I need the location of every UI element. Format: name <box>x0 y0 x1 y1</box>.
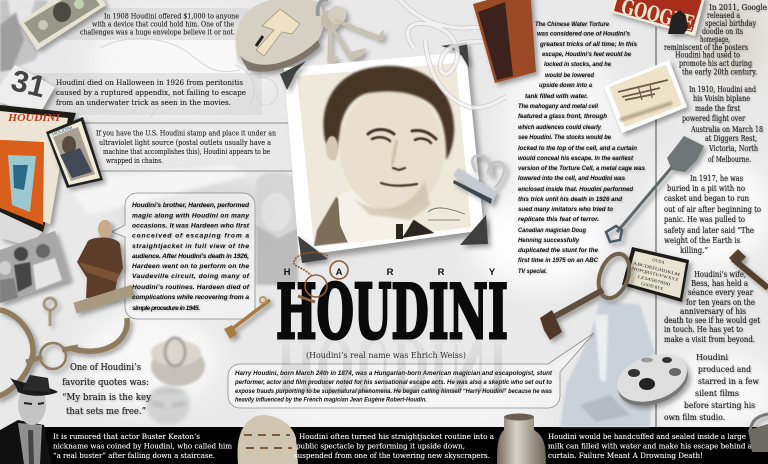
text: buried alive 1917: casket and began to run <box>664 194 749 203</box>
faded padlock <box>151 338 205 386</box>
text: Bess seance: make a visit from beyond. <box>664 335 755 344</box>
text: Chinese Water Torture: see Houdini. The stocks would be <box>518 134 611 141</box>
text: Hardeen: straightjacket in full view of the <box>132 243 249 250</box>
text: Bess seance <box>664 270 761 344</box>
text: Chinese Water Torture: version of the Torture Cell, a metal cage was <box>518 165 645 172</box>
divider lines: stamp note <box>60 123 300 171</box>
text: Halloween death: caused by a ruptured appendix, not failing to escape <box>56 88 246 97</box>
rope <box>396 0 506 108</box>
icon: Ouija board: NOPQRSTUVWXYZ <box>631 266 679 282</box>
portrait photo of Houdini <box>284 52 488 261</box>
text: Halloween death <box>56 78 246 107</box>
text band: Halloween <box>0 73 262 115</box>
text: favorite quote: One of Houdini’s <box>70 363 141 373</box>
text: 1908 challenge: challenges was a huge envelope believe it or not. <box>80 28 235 36</box>
title: Harry: A <box>336 267 343 278</box>
icon: handcuffs <box>0 290 133 397</box>
text: Hardeen: Houdini’s routines. Hardeen died of <box>132 284 250 291</box>
text: Buster nickname: nickname was coined by Houdini, who called him <box>53 442 232 450</box>
text: Google doodle: released a <box>707 11 740 20</box>
text: Chinese Water Torture: featured a glass front, through <box>518 113 607 120</box>
center callout box <box>228 333 594 408</box>
text: Hardeen: conceived of escaping from a <box>132 232 249 240</box>
text: Chinese Water Torture: greatest tricks of all time; In this <box>539 41 637 48</box>
poster book <box>0 105 76 246</box>
text: buried alive 1917 <box>664 174 761 255</box>
text: milk can escape: Houdini would be handcuffed and sealed inside a large <box>548 432 746 441</box>
text: Chinese Water Torture: duplicated the stunt for the <box>518 247 598 254</box>
text: film studio: Houdini <box>696 353 728 362</box>
text: Voisin biplane: his Voisin biplane <box>693 94 750 103</box>
text: Chinese Water Torture: lowered into the cell, and Houdini was <box>518 175 625 182</box>
title: Harry: R <box>438 267 445 278</box>
text: Voisin biplane: powered flight over <box>682 114 745 123</box>
text: Chinese Water Torture: would conceal his escape. In the earliest <box>518 155 634 162</box>
text: buried alive 1917: panic. He was pulled to <box>664 215 745 224</box>
text: Houdini biography <box>234 370 553 404</box>
icon: calendar 31: 31 <box>8 64 49 104</box>
text: Chinese Water Torture: Henning successfully <box>518 237 579 244</box>
text: 1908 challenge: with a device that could hold him. One of the <box>92 20 234 28</box>
text: Voisin biplane: of Melbourne. <box>708 155 751 164</box>
text: film studio: produced and <box>698 365 751 374</box>
text: film studio <box>664 353 759 422</box>
title: Harry: H <box>284 267 291 278</box>
text: U.S. stamp: machine that accomplishes this), Houdini appears to be <box>103 147 270 156</box>
text: Chinese Water Torture: locked to the top of the cell, and a curtain <box>518 145 637 152</box>
figure: Hardeen <box>77 220 123 298</box>
text: film studio: own film studio. <box>664 413 725 422</box>
text: milk can escape: milk can filled with water and make his escape behind a <box>548 442 752 450</box>
icon: Ouija board: GOOD BYE <box>641 281 664 291</box>
text: Bess seance: anniversary of his <box>680 307 746 316</box>
text: Houdini biography: heavily influenced by the French magician Jean Eugène Robert-Houdin. <box>235 396 427 404</box>
icon: milk can <box>497 414 546 464</box>
text: Chinese Water Torture: which audiences could clearly <box>518 124 601 131</box>
icon: binder clip <box>453 156 504 204</box>
text: Chinese Water Torture: The mahogany and metal cell <box>518 103 598 110</box>
text: Buster nickname: “a real buster” after falling down a staircase. <box>53 451 215 460</box>
text: Google doodle: homepage, <box>700 35 730 44</box>
text: Chinese Water Torture: upside down into a <box>539 82 592 89</box>
text: film studio: before starting his <box>684 401 755 410</box>
text: Bess seance: for ten years on the <box>686 298 755 307</box>
icon: straitjacket <box>238 415 298 464</box>
text: Chinese Water Torture: sued many imitators who tried to <box>518 206 613 213</box>
faded portrait top left <box>0 0 48 72</box>
poster book: HOUDINI <box>7 112 61 124</box>
text: Chinese Water Torture: would be lowered <box>545 72 595 79</box>
text: Chinese Water Torture: this trick until his death in 1926 and <box>518 196 623 203</box>
icon: big skeleton key <box>540 250 635 340</box>
text: Chinese Water Torture: Canadian magician Doug <box>518 227 586 234</box>
icon: calendar 31 <box>0 64 55 117</box>
subtitle: real name: (Houdini’s real name was Ehrich Weiss) <box>306 351 466 360</box>
text: Google doodle: Houdini had used to <box>675 50 740 60</box>
icon: photo corners <box>280 42 488 263</box>
text: U.S. stamp: If you have the U.S. Houdini stamp and place it under an <box>96 128 276 138</box>
text: 1908 challenge: In 1908 Houdini offered $1,000 to anyone <box>104 12 239 20</box>
text: favorite quote: that sets me free.” <box>66 407 146 417</box>
text: U.S. stamp: wrapped in chains. <box>106 156 163 165</box>
text: Chinese Water Torture: replicate this feat of terror. <box>518 216 599 223</box>
text: Google doodle <box>664 3 767 76</box>
icon: Ouija board: ABCDEFGHIJKLM <box>633 260 681 277</box>
text: Houdini biography: Harry Houdini, born March 24th in 1874, was a Hungarian-born American magician and escapologist, stunt <box>235 370 553 377</box>
text: buried alive 1917: In 1917, he was <box>690 174 743 183</box>
text: Halloween death: from an underwater trick as seen in the movies. <box>56 98 231 107</box>
text: milk can escape <box>548 432 752 460</box>
icon: Ouija board <box>622 247 689 302</box>
text: Chinese Water Torture: escape, Houdini’s feet would be <box>542 51 631 58</box>
text: 1908 challenge <box>80 12 239 36</box>
text: Bess seance: in touch. He has yet to <box>664 325 743 334</box>
text: Houdini biography: performer, actor and film producer noted for his sensational escape acts. He was also a skeptic who set out to <box>234 379 552 386</box>
text: Google doodle: doodle on its <box>702 27 743 36</box>
text: favorite quote: “My brain is the key <box>62 392 152 403</box>
text band: 1908 challenge <box>60 8 255 40</box>
icon: lock bottom right <box>748 414 768 452</box>
title: Houdini: HOUDINI <box>276 268 508 356</box>
title: Harry: Y <box>489 267 496 278</box>
text: straightjacket routine <box>294 432 494 460</box>
text: Voisin biplane <box>682 85 763 164</box>
icon: Ouija board: 1234567890 <box>637 274 672 287</box>
text: Hardeen <box>132 202 250 312</box>
text: Chinese Water Torture: TV special. <box>518 268 547 275</box>
text: Bess seance: séance every year <box>688 288 753 297</box>
icon: postage stamp <box>46 117 103 188</box>
icon: Ouija board: OUIJA <box>652 257 666 265</box>
column divider <box>655 27 657 427</box>
family photo <box>0 231 70 303</box>
text: milk can escape: curtain. Failure Meant A Drowning Death! <box>548 451 703 460</box>
text: Halloween death: Houdini died on Halloween in 1926 from peritonitis <box>56 78 243 87</box>
title: Harry <box>284 267 496 278</box>
text: Hardeen: occasions. It was Hardeen who first <box>132 222 250 230</box>
Hardeen callout box <box>112 193 255 319</box>
icon: small chain rings <box>294 252 348 302</box>
text: Chinese Water Torture: first time in 1975 on an ABC <box>518 257 598 264</box>
text: Hardeen: complications while recovering from a <box>132 294 249 301</box>
text: Google doodle: reminiscent of the posters <box>664 43 748 52</box>
icon: film reel <box>611 346 694 414</box>
title: Harry: R <box>387 267 394 278</box>
text: favorite quote <box>62 363 152 417</box>
text: Chinese Water Torture <box>518 21 645 275</box>
icon: shovel <box>606 136 704 242</box>
photo: biplane <box>604 60 687 133</box>
text: Buster nickname: It is rumored that actor Buster Keaton’s <box>53 432 200 441</box>
text: straightjacket routine: Houdini often turned his straightjacket routine into a <box>299 432 494 441</box>
icon: postage stamp: HOUDINI <box>52 125 74 138</box>
text: Voisin biplane: made the first <box>695 104 741 113</box>
text: Chinese Water Torture: The Chinese Water Torture <box>535 21 609 28</box>
text: Chinese Water Torture: locked in stocks, and he <box>544 61 611 68</box>
text: straightjacket routine: public spectacle by performing it upside down, <box>296 442 465 450</box>
icon: orange book top center <box>473 0 536 83</box>
text: U.S. stamp: ultraviolet light source (postal outlets usually have a <box>99 138 272 147</box>
text: Hardeen: magic along with Houdini on many <box>132 212 249 220</box>
text: Chinese Water Torture: was considered one of Houdini’s <box>537 30 630 38</box>
text: Chinese Water Torture: tank filled with water. <box>525 93 588 100</box>
text: Hardeen: Vaudeville circuit, doing many of <box>132 273 250 280</box>
icon: keys <box>321 6 384 65</box>
text: U.S. stamp <box>96 128 276 165</box>
text: straightjacket routine: suspended from one of the towering new skyscrapers. <box>294 451 490 460</box>
text: film studio: silent films <box>695 389 739 398</box>
text: buried alive 1917: safety and later said “The <box>664 226 754 235</box>
photograph <box>297 63 471 246</box>
text: Hardeen: Houdini’s brother, Hardeen, performed <box>132 202 250 209</box>
faded man <box>145 385 192 425</box>
text: Hardeen: audience. After Houdini’s death in 1926, <box>132 253 249 260</box>
text: favorite quote: favorite quotes was: <box>62 378 149 388</box>
icon: Google poster <box>610 0 705 36</box>
icon: dollar bill <box>19 0 106 50</box>
text: Hardeen: simple procedure in 1945. <box>132 305 200 312</box>
text: Houdini biography: expose frauds purporting to be supernatural phenomena. He began calling himself “Harry Houdini” because he was <box>235 388 552 395</box>
text: buried alive 1917: buried in a pit with no <box>667 184 745 193</box>
text: Hardeen: Hardeen went on to perform on the <box>132 263 249 270</box>
faded figure beside portrait <box>256 172 300 285</box>
text: Buster nickname <box>53 432 232 460</box>
text: buried alive 1917: weight of the Earth is <box>664 236 740 245</box>
icon: big padlock <box>236 0 328 72</box>
icon: small rusty key <box>224 297 270 339</box>
icon: small dark key right <box>729 249 768 288</box>
photo: Buster Keaton <box>0 375 58 464</box>
faded rope sketch background <box>100 39 278 118</box>
text: Chinese Water Torture: enclosed inside that. Houdini performed <box>518 186 634 193</box>
faded man with cuffs <box>550 300 655 427</box>
text: Bess seance: Bess, has held a <box>691 279 748 288</box>
text: Bess seance: Houdini’s wife, <box>694 270 746 279</box>
text: buried alive 1917: killing.” <box>680 246 708 255</box>
text: film studio: starred in a few <box>698 377 759 386</box>
black footer bar <box>40 427 768 464</box>
title: Houdini reflection: HOUDINI <box>276 320 508 408</box>
